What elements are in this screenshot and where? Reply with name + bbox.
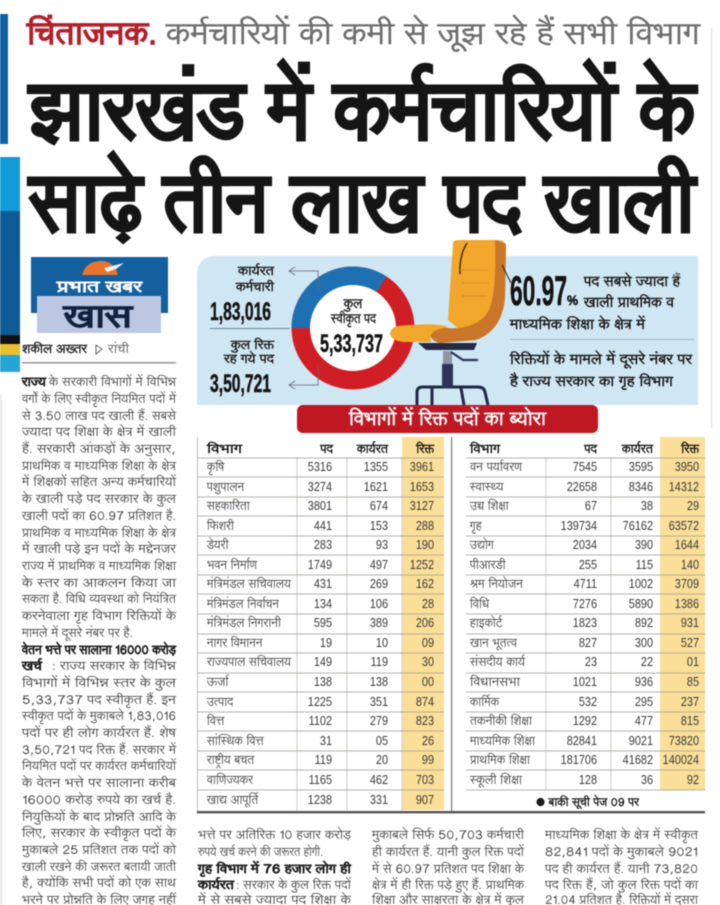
table: right department vacancies: 63572 bbox=[669, 518, 699, 533]
table: left department vacancies: 3801 bbox=[308, 498, 332, 513]
table: right department vacancies: 7276 bbox=[573, 596, 597, 611]
callout: 60.97 percent: पद सबसे ज्यादा हैं bbox=[583, 271, 681, 293]
table: left department vacancies: 288 bbox=[416, 518, 434, 533]
article text: first column: करनेवाला गृह विभाग रिक्तियों के bbox=[21, 607, 177, 627]
table: right department vacancies: 477 bbox=[635, 713, 653, 728]
donut chart: total sanctioned posts: कुल bbox=[343, 294, 363, 315]
table: left department vacancies: मंत्रिमंडल सचिवालय bbox=[206, 575, 292, 595]
table: left department vacancies: भवन निर्माण bbox=[207, 557, 257, 576]
article text: first column: से 3.50 लाख पद खाली हैं. सबसे bbox=[21, 407, 176, 427]
article text: first column: नियमित पदों पर कार्यरत कर्मचारियों bbox=[21, 757, 177, 777]
table header row: पद bbox=[583, 441, 598, 460]
table header row bbox=[469, 440, 699, 460]
table: left department vacancies: फिशरी bbox=[206, 518, 235, 537]
callout: 60.97 percent: खाली प्राथमिक व bbox=[583, 292, 675, 314]
table: right department vacancies: 38 bbox=[641, 498, 653, 513]
table: left department vacancies: 149 bbox=[314, 654, 332, 669]
callout: 60.97 percent bbox=[502, 265, 681, 336]
article text: second column: गृह विभाग में 76 हजार लोग ही bbox=[197, 860, 352, 880]
article text: fourth column: पद रिक्त हैं, जो कुल रिक्त पदों का bbox=[544, 876, 699, 896]
callout: 60.97 percent: % bbox=[567, 292, 578, 308]
article text: first column: खर्च bbox=[21, 657, 43, 677]
table: left department vacancies: 703 bbox=[416, 772, 434, 787]
table: right department vacancies: 14312 bbox=[669, 479, 699, 494]
table: right department vacancies: 1644 bbox=[675, 537, 699, 552]
table: left department vacancies: 134 bbox=[314, 596, 332, 611]
article text: third column: ही कार्यरत हैं. यानी कुल रिक्त पदों bbox=[371, 843, 525, 863]
table: left department vacancies: 431 bbox=[314, 576, 332, 591]
main headline bbox=[27, 52, 698, 272]
table: right department vacancies: उद्योग bbox=[469, 537, 495, 556]
article text: fourth column: पद ही कार्यरत हैं. यानी 73,820 bbox=[544, 860, 698, 880]
table: right department vacancies: 115 bbox=[636, 557, 653, 572]
article text: first column: खाली रखने की जरूरत बतायी जाती bbox=[21, 858, 177, 878]
table: right department vacancies: 1823 bbox=[573, 615, 597, 630]
table: left department vacancies: 119 bbox=[315, 752, 332, 767]
table: right department vacancies: स्वास्थ्य bbox=[469, 479, 504, 498]
table: left department vacancies: 3127 bbox=[410, 498, 434, 513]
table: left department vacancies: 1621 bbox=[364, 479, 388, 494]
table: left department vacancies: 106 bbox=[370, 596, 388, 611]
article text: third column: क्षेत्र में ही रिक्त पड़े हुए हैं. प्राथमिक bbox=[372, 876, 525, 896]
article text: first column: 16000 करोड़ रुपये का खर्च है. bbox=[22, 791, 176, 811]
callout: home department second bbox=[509, 349, 693, 393]
table: left department vacancies: मंत्रिमंडल निर्वाचन bbox=[206, 595, 280, 615]
logo: Prabhat Khabar Khas: खास bbox=[63, 293, 134, 343]
callout: total vacant posts: 3,50,721 bbox=[210, 370, 271, 398]
table: right department vacancies: 7545 bbox=[573, 459, 597, 474]
table: right department vacancies: गृह bbox=[469, 518, 482, 537]
article text: first column: में शिक्षकों सहित अन्य कर्मचारियों bbox=[21, 473, 177, 493]
article text: third column bbox=[371, 826, 525, 905]
table: right department vacancies: कार्मिक bbox=[469, 694, 499, 713]
table: right department vacancies: 67 bbox=[585, 498, 597, 513]
donut chart: total sanctioned posts: 5,33,737 bbox=[320, 330, 383, 358]
article text: first column: लिए, सरकार के स्वीकृत पदों के bbox=[21, 824, 177, 844]
table header row: रिक्त bbox=[680, 441, 699, 460]
callout: total vacant posts: कुल रिक्त bbox=[230, 336, 275, 356]
table: right department vacancies: 3709 bbox=[675, 576, 699, 591]
table: left department vacancies: 99 bbox=[422, 752, 434, 767]
article text: first column: नियुक्तियों के बाद प्रोन्नति आदि के bbox=[21, 808, 177, 828]
callout: 60.97 percent: माध्यमिक शिक्षा के क्षेत्र में bbox=[509, 314, 647, 336]
table: right department vacancies: वन पर्यावरण bbox=[469, 458, 523, 478]
table: left department vacancies: 206 bbox=[416, 615, 434, 630]
table: left department vacancies: वाणिज्यकर bbox=[206, 772, 254, 791]
table: right department vacancies: 9021 bbox=[629, 733, 653, 748]
table: right department vacancies: 892 bbox=[635, 615, 653, 630]
article text: first column: हैं. सरकारी आंकड़ों के अनुसार, bbox=[21, 440, 176, 460]
table: right department vacancies: विधानसभा bbox=[469, 673, 521, 693]
table: right department vacancies: 1386 bbox=[675, 596, 699, 611]
table: right department vacancies: 300 bbox=[635, 635, 653, 650]
callout: home department second: है राज्य सरकार का गृह विभाग bbox=[509, 371, 674, 393]
table: left department vacancies: 1102 bbox=[309, 713, 332, 728]
article text: second column: रुपये खर्च करने की जरूरत होगी. bbox=[197, 843, 323, 863]
table: left department vacancies: सहकारिता bbox=[206, 498, 251, 517]
table header row: रिक्त bbox=[415, 441, 434, 460]
donut chart: total sanctioned posts bbox=[301, 276, 405, 380]
table: left department vacancies: सांस्थिक वित्त bbox=[206, 733, 264, 752]
table: right department vacancies: 255 bbox=[579, 557, 597, 572]
article text: first column: राज्य में प्राथमिक व माध्यमिक शिक्षा bbox=[21, 557, 177, 577]
table: left department vacancies: 1252 bbox=[410, 557, 434, 572]
table: left department vacancies: 05 bbox=[376, 733, 388, 748]
divider bbox=[510, 339, 695, 340]
table: right department vacancies bbox=[466, 437, 705, 791]
table: right department vacancies: 22658 bbox=[567, 479, 597, 494]
table: right department vacancies: 4711 bbox=[574, 576, 597, 591]
table: right department vacancies: माध्यमिक शिक्षा bbox=[469, 732, 536, 752]
table: left department vacancies: राज्यपाल सचिवालय bbox=[206, 653, 292, 673]
table header row: पद bbox=[319, 441, 334, 460]
table: left department vacancies: 3961 bbox=[410, 459, 434, 474]
table: left department vacancies: पशुपालन bbox=[206, 479, 245, 498]
kicker headline: कर्मचारियों की कमी से जूझ रहे हैं सभी विभाग bbox=[165, 12, 701, 60]
table: right department vacancies: 532 bbox=[579, 694, 597, 709]
divider bbox=[210, 328, 290, 329]
table: left department vacancies: 823 bbox=[416, 713, 434, 728]
article text: first column: स्वीकृत पदों के मुकाबले 1,83,016 bbox=[21, 707, 176, 727]
table: left department vacancies: 351 bbox=[370, 694, 388, 709]
table: right department vacancies: प्राथमिक शिक्षा bbox=[469, 751, 531, 771]
table: left department vacancies: उत्पाद bbox=[206, 694, 234, 713]
byline bbox=[22, 340, 176, 364]
article text: second column: कार्यरत bbox=[197, 876, 235, 896]
article text: first column: के वेतन भत्ते पर सालाना करीब bbox=[21, 774, 176, 794]
article text: third column: मुकाबले सिर्फ 50,703 कर्मचारी bbox=[371, 826, 525, 846]
table: left department vacancies: 20 bbox=[376, 752, 388, 767]
table: left department vacancies: 283 bbox=[314, 537, 332, 552]
article text: first column: वेतन भत्ते पर सालाना 16000 करोड़ bbox=[21, 641, 177, 661]
table: right department vacancies: 936 bbox=[635, 674, 653, 689]
table: left department vacancies: 1749 bbox=[308, 557, 332, 572]
article text: second column: : सरकार के कुल रिक्त पदों bbox=[236, 876, 352, 896]
table: left department vacancies: 93 bbox=[376, 537, 388, 552]
table: left department vacancies: खाद्य आपूर्ति bbox=[206, 792, 259, 811]
table: left department vacancies: 31 bbox=[320, 733, 332, 748]
table: left department vacancies: 10 bbox=[376, 635, 388, 650]
table: left department vacancies: 1225 bbox=[308, 694, 332, 709]
table: right department vacancies: 8346 bbox=[629, 479, 653, 494]
table: left department vacancies: 00 bbox=[422, 674, 434, 689]
table: left department vacancies: 3274 bbox=[308, 479, 332, 494]
table: right department vacancies: खान भूतत्व bbox=[469, 634, 517, 654]
table: right department vacancies: 1292 bbox=[573, 713, 597, 728]
logo: Prabhat Khabar Khas: प्रभात खबर bbox=[56, 276, 143, 300]
table: left department vacancies: 331 bbox=[370, 792, 388, 807]
table: right department vacancies: तकनीकी शिक्षा bbox=[469, 712, 533, 732]
table: left department vacancies: 30 bbox=[422, 654, 434, 669]
article text: first column: सकता है. विधि व्यवस्था को नियंत्रित bbox=[21, 590, 177, 610]
callout: working employees: कर्मचारी bbox=[235, 278, 275, 298]
table: left department vacancies: मंत्रिमंडल निगरानी bbox=[206, 614, 282, 634]
table: right department vacancies: 815 bbox=[681, 713, 699, 728]
table: right department vacancies: हाइकोर्ट bbox=[469, 615, 503, 634]
article text: second column bbox=[197, 826, 352, 905]
panel: infographic background bbox=[197, 256, 698, 405]
table: left department vacancies: 138 bbox=[370, 674, 388, 689]
article text: fourth column: माध्यमिक शिक्षा के क्षेत्र में स्वीकृत bbox=[544, 826, 699, 846]
table: right department vacancies: 181706 bbox=[561, 752, 597, 767]
table: left department vacancies: 1238 bbox=[308, 792, 332, 807]
table: left department vacancies: 19 bbox=[320, 635, 332, 650]
table: right department vacancies: 29 bbox=[687, 498, 699, 513]
callout: working employees bbox=[210, 262, 318, 326]
table: left department vacancies: कृषि bbox=[206, 459, 225, 478]
table: right department vacancies: 139734 bbox=[561, 518, 597, 533]
table: left department vacancies: 26 bbox=[422, 733, 434, 748]
table: right department vacancies: 23 bbox=[585, 654, 597, 669]
table: right department vacancies: 140024 bbox=[663, 752, 699, 767]
table: left department vacancies: 497 bbox=[370, 557, 388, 572]
banner: table heading bbox=[297, 405, 598, 435]
table: left department vacancies: 162 bbox=[416, 576, 434, 591]
logo: Prabhat Khabar Khas bbox=[31, 257, 168, 343]
article text: first column: 3,50,721 पद रिक्त हैं. सरकार में bbox=[22, 741, 177, 761]
table: left department vacancies: 389 bbox=[370, 615, 388, 630]
table: left department vacancies: 1165 bbox=[309, 772, 332, 787]
table: left department vacancies: 441 bbox=[314, 518, 332, 533]
table: right department vacancies: 73820 bbox=[669, 733, 699, 748]
article text: first column: मुकाबले 25 प्रतिशत तक पदों को bbox=[21, 841, 177, 861]
banner: table heading: विभागों में रिक्त पदों का ब्योरा bbox=[348, 406, 547, 435]
table: left department vacancies: 462 bbox=[370, 772, 388, 787]
callout: total vacant posts: रह गये पद bbox=[223, 350, 275, 370]
article text: first column: पदों पर ही लोग कार्यरत हैं. शेष bbox=[21, 724, 177, 744]
article text: first column: के सरकारी विभागों में विभिन्न bbox=[48, 373, 177, 393]
table: left department vacancies: 190 bbox=[416, 537, 434, 552]
article text: first column: 5,33,737 पद स्वीकृत हैं. इन bbox=[22, 691, 177, 711]
article text: first column: खाली पदों का 60.97 प्रतिशत है. bbox=[21, 507, 176, 527]
table: left department vacancies: राष्ट्रीय बचत bbox=[206, 752, 255, 771]
table header row bbox=[206, 440, 434, 460]
table: left department vacancies: 5316 bbox=[308, 459, 332, 474]
donut chart: total sanctioned posts: स्वीकृत पद bbox=[330, 309, 377, 330]
table: left department vacancies: 279 bbox=[370, 713, 388, 728]
table: right department vacancies: 01 bbox=[687, 654, 699, 669]
article text: first column: : राज्य सरकार के विभिन्न bbox=[52, 657, 177, 677]
table: right department vacancies: 22 bbox=[641, 654, 653, 669]
table: left department vacancies: 138 bbox=[314, 674, 332, 689]
table: right department vacancies: 82841 bbox=[567, 733, 597, 748]
article text: first column: है, क्योंकि सभी पदों को एक साथ bbox=[21, 874, 177, 894]
table: right department vacancies: 85 bbox=[687, 674, 699, 689]
table: left department vacancies: 1653 bbox=[410, 479, 434, 494]
table: left department vacancies: 907 bbox=[416, 792, 434, 807]
callout: working employees: 1,83,016 bbox=[210, 298, 271, 326]
article text: first column: राज्य bbox=[21, 373, 47, 393]
table: right department vacancies: 2034 bbox=[573, 537, 597, 552]
article text: first column: के खाली पड़े पद सरकार के कुल bbox=[21, 490, 177, 510]
table: right department vacancies: 295 bbox=[635, 694, 653, 709]
table: right department vacancies: संसदीय कार्य bbox=[469, 653, 526, 673]
table: left department vacancies: 1355 bbox=[364, 459, 388, 474]
table: right department vacancies: स्कूली शिक्षा bbox=[469, 771, 523, 791]
callout: home department second: रिक्तियों के मामले में दूसरे नंबर पर bbox=[509, 349, 693, 371]
callout: working employees: कार्यरत bbox=[237, 262, 275, 282]
table: right department vacancies: 827 bbox=[579, 635, 597, 650]
table: right department vacancies: 931 bbox=[681, 615, 699, 630]
table header row: कार्यरत bbox=[356, 440, 389, 460]
table: right department vacancies: 76162 bbox=[623, 518, 653, 533]
byline: शकील अख्तर bbox=[22, 340, 88, 360]
table header row: कार्यरत bbox=[621, 440, 654, 460]
table: right department vacancies: 1002 bbox=[629, 576, 653, 591]
article text: fourth column: 82,841 पदों के मुकाबले 9021 bbox=[545, 843, 698, 863]
table: left department vacancies: डेयरी bbox=[206, 537, 229, 556]
article text: first column: प्राथमिक व माध्यमिक शिक्षा के क्षेत्र bbox=[21, 457, 176, 477]
main headline: झारखंड में कर्मचारियों के bbox=[27, 52, 697, 180]
icon: office chair bbox=[390, 240, 506, 405]
article text: fourth column bbox=[544, 826, 699, 905]
callout: 60.97 percent: 60.97 bbox=[510, 267, 567, 314]
table: right department vacancies: 41682 bbox=[623, 752, 653, 767]
article text: first column bbox=[21, 373, 177, 905]
article text: first column: मामले में दूसरे नंबर पर है. bbox=[21, 624, 133, 644]
table: right department vacancies: 3595 bbox=[629, 459, 653, 474]
article text: first column: के स्तर का आकलन किया जा bbox=[21, 574, 177, 594]
table: left department vacancies: ऊर्जा bbox=[206, 674, 229, 693]
byline: रांची bbox=[107, 341, 130, 360]
table: right department vacancies: 92 bbox=[687, 772, 699, 787]
table: right department vacancies: 237 bbox=[681, 694, 699, 709]
article text: second column: भत्ते पर अतिरिक्त 10 हजार करोड़ bbox=[198, 826, 351, 846]
article text: first column: प्राथमिक व माध्यमिक शिक्षा के क्षेत्र bbox=[21, 524, 176, 544]
table: right department vacancies: 5890 bbox=[629, 596, 653, 611]
article text: first column: में खाली पड़े इन पदों के मद्देनजर bbox=[21, 540, 177, 560]
table: right department vacancies: 1021 bbox=[573, 674, 597, 689]
table: right department vacancies: उच्च शिक्षा bbox=[469, 498, 510, 517]
table: left department vacancies: 674 bbox=[370, 498, 388, 513]
table: right department vacancies: पीआरडी bbox=[469, 557, 506, 576]
table header row: विभाग bbox=[206, 440, 243, 460]
article text: third column: में से 60.97 प्रतिशत पद शिक्षा के bbox=[371, 860, 525, 880]
table footnote: ● बाकी सूची पेज 09 पर bbox=[536, 793, 640, 812]
table: right department vacancies: 527 bbox=[681, 635, 699, 650]
table: right department vacancies: श्रम नियोजन bbox=[470, 575, 524, 595]
table: right department vacancies: 390 bbox=[635, 537, 653, 552]
table header row: विभाग bbox=[469, 440, 501, 460]
kicker headline: चिंताजनक. bbox=[26, 10, 157, 60]
table: left department vacancies: 874 bbox=[416, 694, 434, 709]
table: right department vacancies: विधि bbox=[469, 596, 490, 615]
table: right department vacancies: 36 bbox=[641, 772, 653, 787]
table: left department vacancies: नागर विमानन bbox=[206, 635, 263, 654]
table: left department vacancies: 09 bbox=[422, 635, 434, 650]
article text: first column: ज्यादा पद शिक्षा के क्षेत्र में खाली bbox=[21, 423, 177, 443]
article text: first column: वर्गों के लिए स्वीकृत नियमित पदों में bbox=[21, 390, 177, 410]
callout: total vacant posts bbox=[210, 336, 318, 398]
kicker headline bbox=[26, 10, 701, 60]
table: left department vacancies: 119 bbox=[371, 654, 388, 669]
article text: first column: विभागों में विभिन्न स्तर के कुल bbox=[21, 674, 177, 694]
table: right department vacancies: 128 bbox=[579, 772, 597, 787]
table: left department vacancies bbox=[197, 437, 705, 813]
table: left department vacancies: 153 bbox=[370, 518, 388, 533]
table: left department vacancies: 28 bbox=[422, 596, 434, 611]
table: left department vacancies: 595 bbox=[314, 615, 332, 630]
table: right department vacancies: 3950 bbox=[675, 459, 699, 474]
table: left department vacancies: वित्त bbox=[206, 713, 225, 732]
table: left department vacancies: 269 bbox=[370, 576, 388, 591]
table: right department vacancies: 140 bbox=[681, 557, 699, 572]
